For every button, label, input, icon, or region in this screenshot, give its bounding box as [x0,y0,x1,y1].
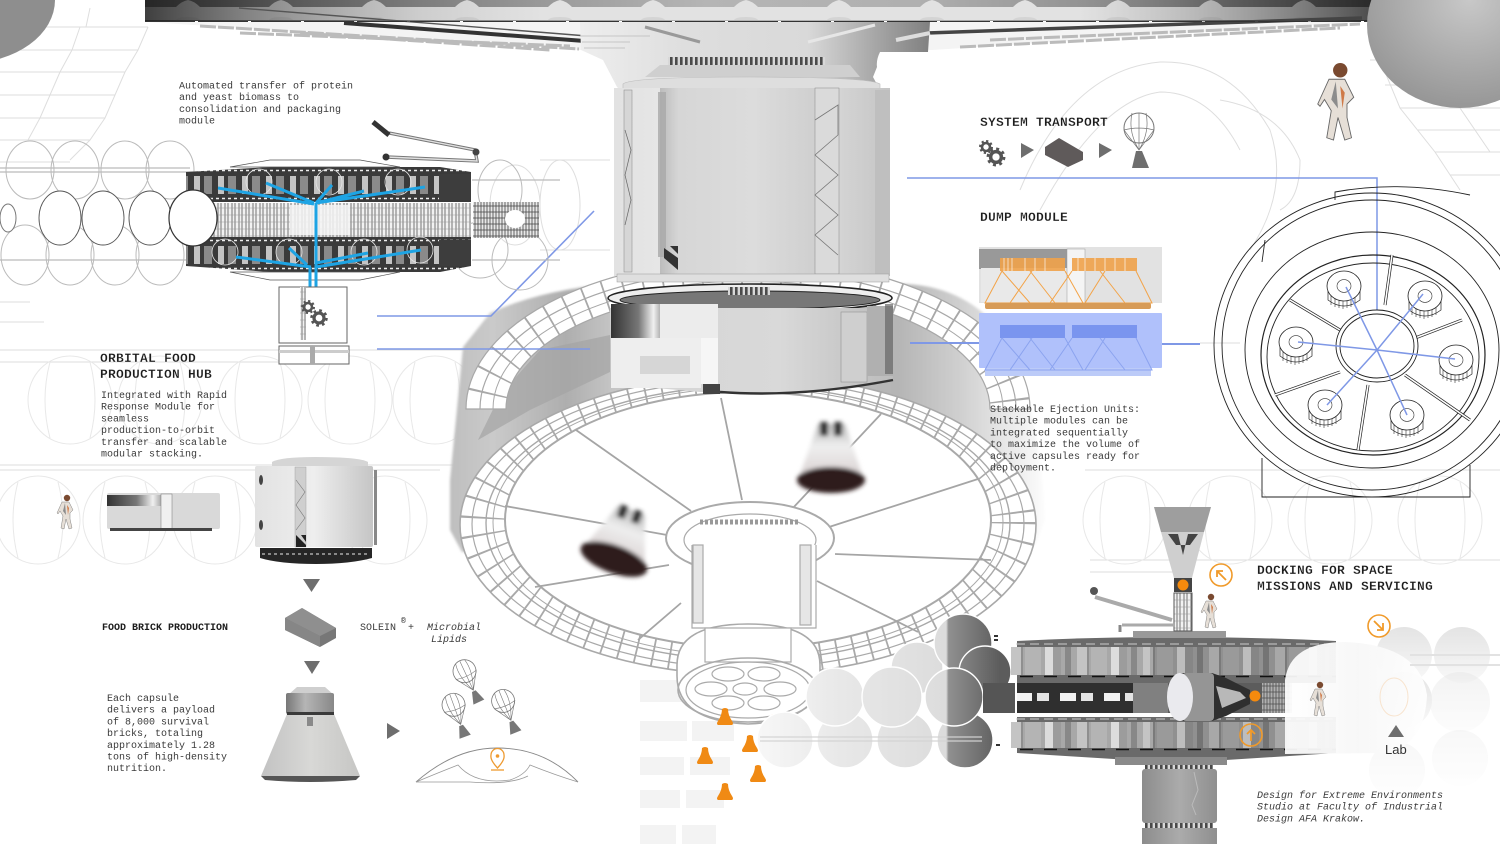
packaging module with gears [279,287,349,364]
blue leader lines around dump module [910,343,1200,344]
text: stackable ejection units: Multiple modules can be [990,416,1128,428]
blue radial lines over pods [1298,287,1455,415]
text: integrated: seamless [101,413,149,425]
text: solein plus microbial lipids: SOLEIN [360,623,396,634]
food brick [285,608,336,647]
ring shadow behind the wireframe [450,284,1045,552]
heading: orbital food production hub: PRODUCTION HUB [100,367,212,382]
small astronaut left [57,495,73,529]
upper ring lattice [466,276,1030,410]
background: faint brick and balloon line art [0,8,1500,572]
docking vehicle, horizontal [1167,673,1292,721]
parachutes landing [439,656,527,741]
credit text: Design AFA Krakow. [1257,813,1365,825]
blurred falling capsule, left [576,496,665,584]
blue leader lines, centre left [377,211,594,349]
text: automated transfer: and yeast biomass to [179,92,299,104]
top right grey sphere [1367,0,1500,108]
lower ring lattice with spokes [460,375,1036,675]
orange callout circles [1210,564,1408,746]
docking vehicle, vertical [1154,507,1211,631]
text: stackable ejection units: to maximize the volume of [990,439,1140,451]
blue line to wheel drawing [907,178,1377,350]
lab label: Lab [1385,742,1407,757]
text: automated transfer: Automated transfer of protein [179,80,353,92]
module A: short ring [107,493,220,531]
docking station: lower cylinder [1142,765,1217,844]
background: faint brick column under lower module [640,680,734,844]
text: each capsule: delivers a payload [107,705,215,717]
central neck connecting disc and cylinder [580,22,930,90]
central dark junction ring [608,284,892,312]
text: integrated: Response Module for [101,402,215,414]
arrow down 1 [303,579,320,592]
text: integrated: transfer and scalable [101,437,227,449]
text: each capsule: bricks, totaling [107,728,203,740]
dump module blue view [979,313,1162,376]
text: integrated: production-to-orbit [101,425,215,437]
dark panel between ring lattices [478,335,610,440]
blurred falling capsule, right [797,422,865,493]
module B: tall cylinder [255,457,377,564]
text: each capsule: tons of high-density [107,752,227,764]
robot arm on docking station [1090,587,1175,632]
left food production module [0,141,560,290]
blue transfer pipes [218,183,425,289]
text: integrated: Integrated with Rapid [101,390,227,402]
text: stackable ejection units: deployment. [990,462,1056,474]
top structure: large disc underside [145,0,1390,50]
text: solein plus microbial lipids: Microbial [427,622,481,634]
text: stackable ejection units: integrated sequentially [990,427,1128,439]
docking station: hub with bands and rail [983,631,1336,765]
arrow right [387,723,400,739]
astronauts on docking station [1201,594,1326,716]
text: solein plus microbial lipids: + [408,623,414,634]
arrow down 2 [304,661,320,674]
capsule [261,687,360,782]
docking rails on the right [1410,655,1500,665]
text: automated transfer: module [179,116,215,128]
text: stackable ejection units: active capsules ready for [990,451,1140,463]
heading: dump module: DUMP MODULE [980,210,1068,225]
text: each capsule: approximately 1.28 [107,740,215,752]
heading: system transport: SYSTEM TRANSPORT [980,115,1108,130]
text: integrated: modular stacking. [101,448,203,460]
top left grey sphere [0,0,55,63]
heading: orbital food production hub: ORBITAL FOOD [100,351,196,366]
heading: food brick production: FOOD BRICK PRODUCTION [102,623,228,634]
wheel line drawing with six capsule pods [1214,187,1500,497]
white translucent lab sphere overlay [1285,642,1427,754]
text: each capsule: of 8,000 survival [107,716,209,728]
text: stackable ejection units: Stackable Ejection Units: [990,404,1140,416]
heading: docking for space missions: DOCKING FOR SPACE [1257,563,1393,578]
lower docking module in wireframe [666,502,834,724]
orange falling capsules [697,708,782,800]
text: solein plus microbial lipids: Lipids [431,634,467,646]
text: solein plus microbial lipids: ® [401,617,406,626]
spheres cluster [757,614,1011,768]
sphere rails [760,737,982,741]
heading: docking for space missions: MISSIONS AND SERVICING [1257,579,1433,594]
text: each capsule: Each capsule [107,693,179,705]
robotic arm on food module [373,122,480,161]
transport flow icons [980,113,1154,168]
text: automated transfer: consolidation and packaging [179,104,341,116]
large astronaut [1318,63,1354,140]
dump module grey view with orange units [979,247,1162,309]
central cylinder module [614,77,890,282]
planet surface with pin [416,748,578,783]
credit text: Design for Extreme Environments [1257,790,1443,802]
base module [610,304,893,394]
text: each capsule: nutrition. [107,763,167,775]
lab marker triangle [1388,725,1404,737]
right-side faint spheres [1369,627,1490,798]
credit text: Studio at Faculty of Industrial [1257,802,1443,814]
